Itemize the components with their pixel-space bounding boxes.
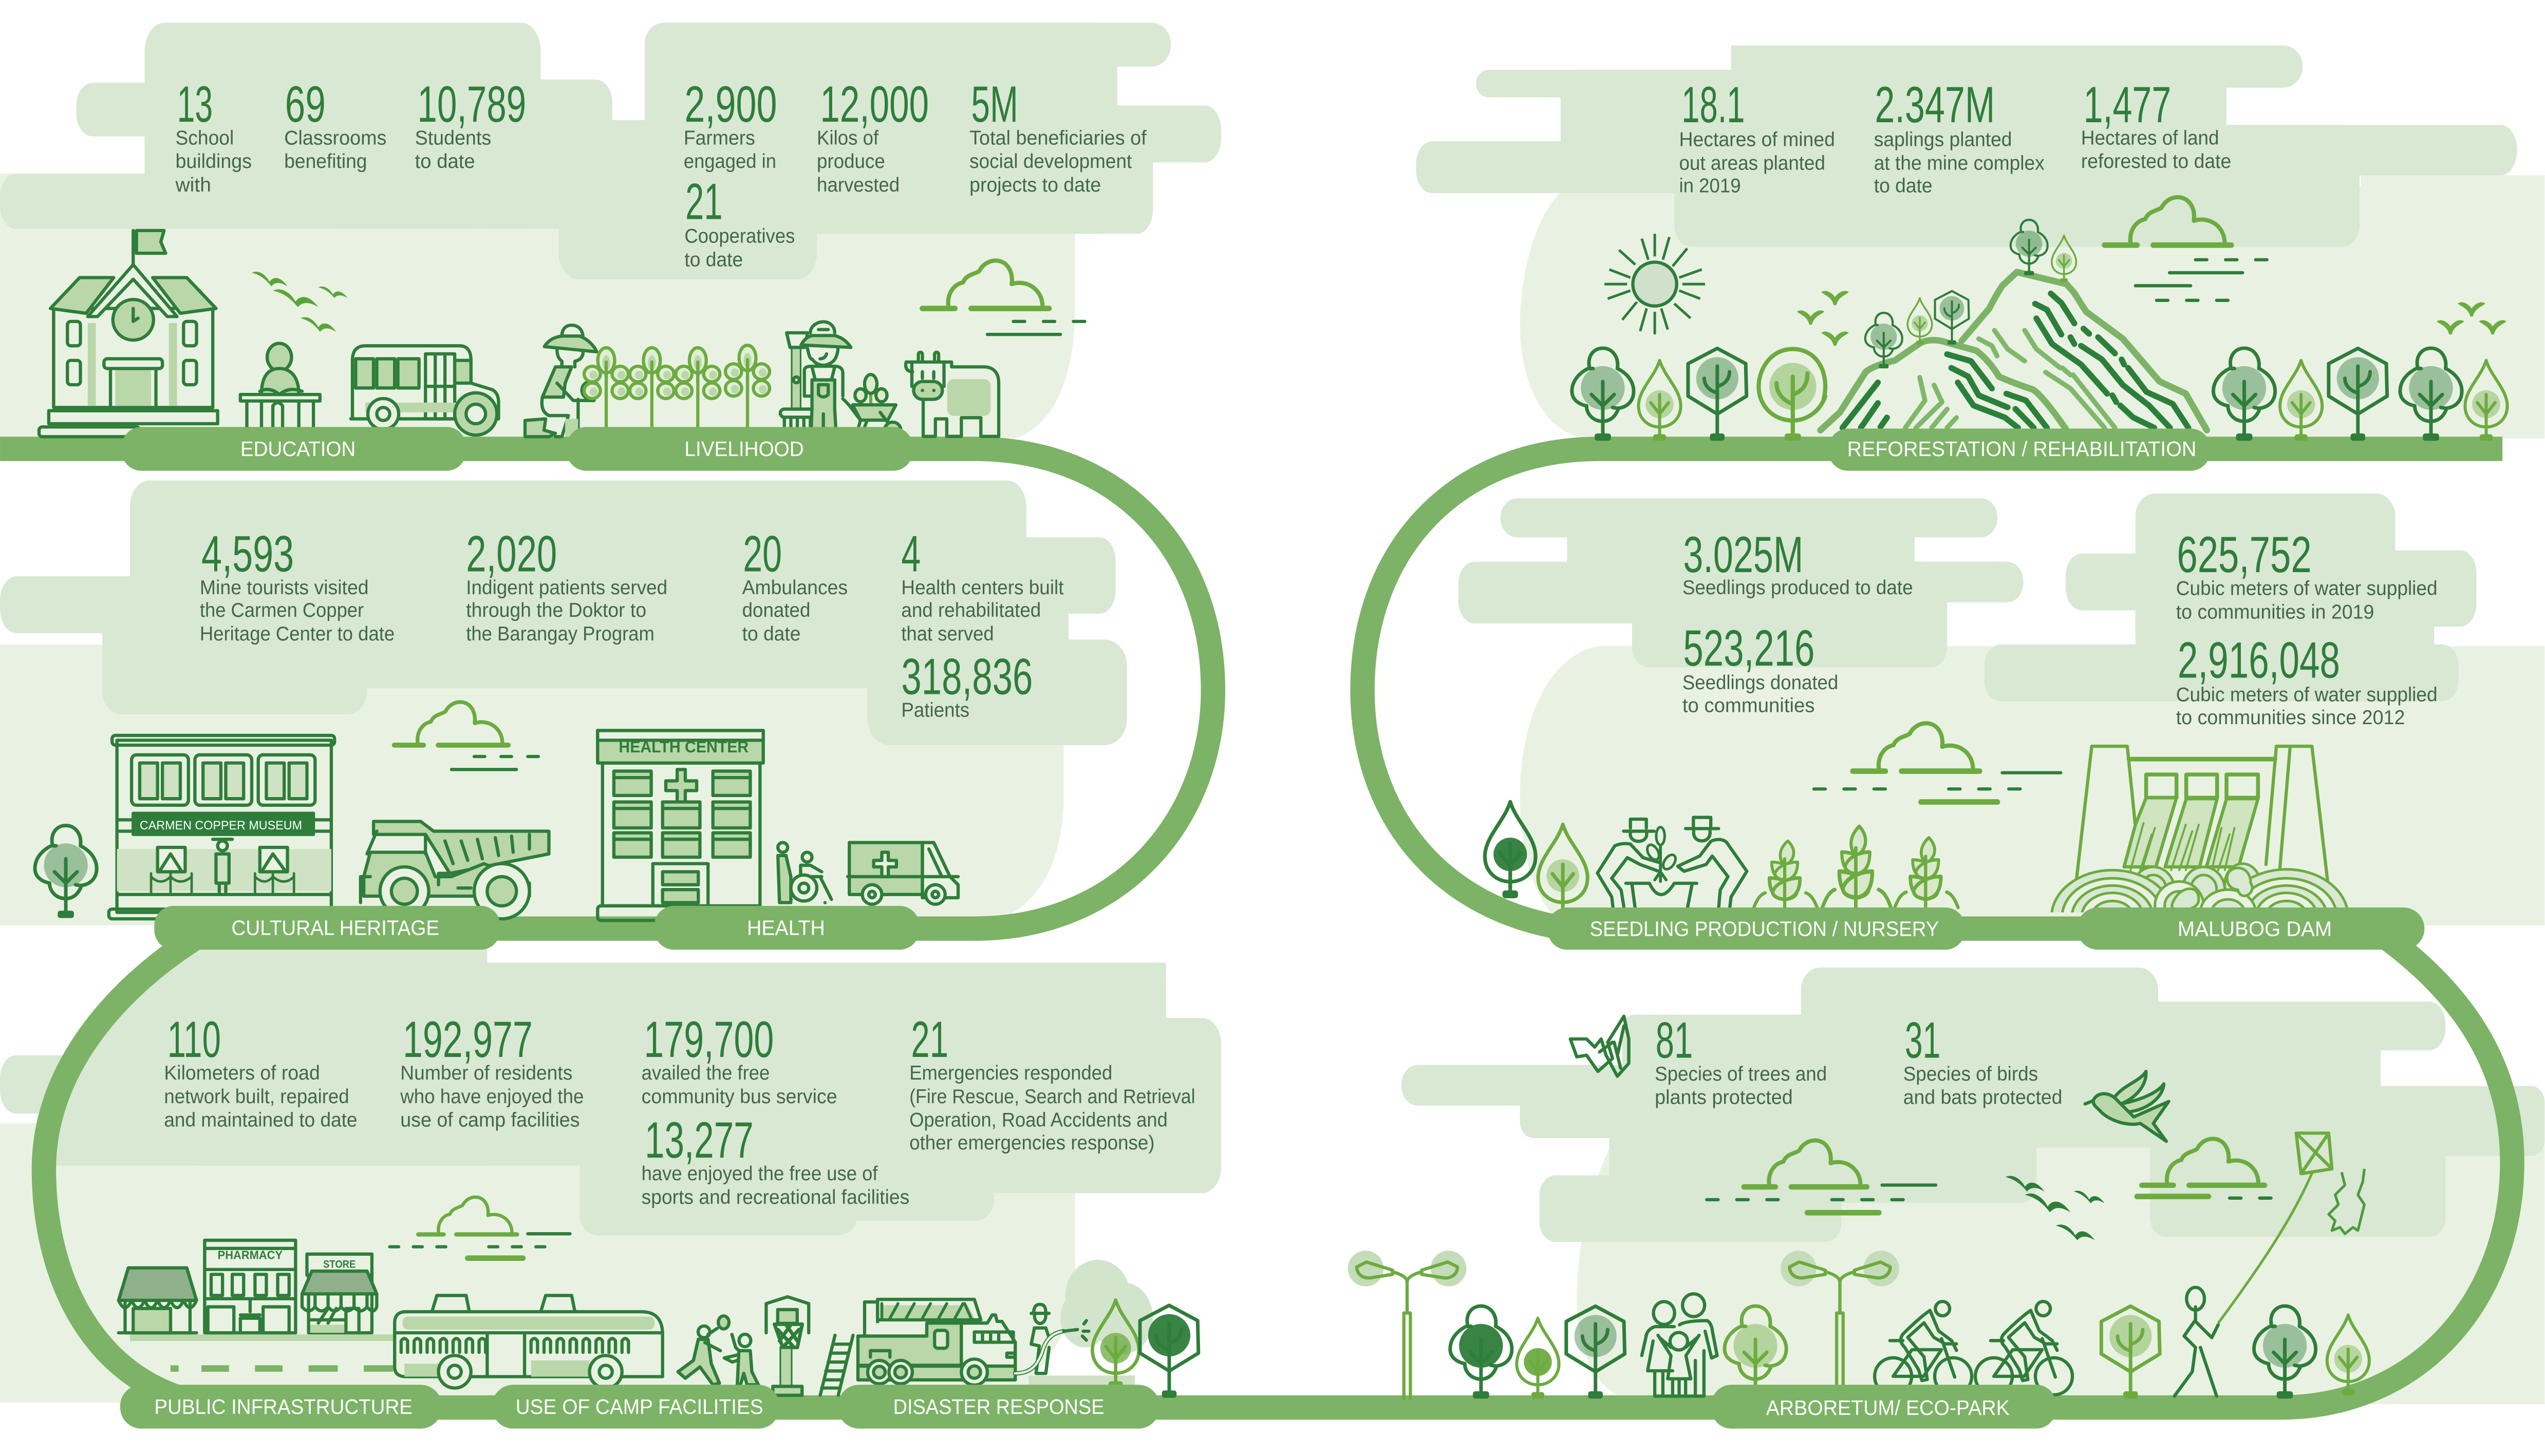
text: museum sign: CARMEN COPPER MUSEUM <box>140 819 302 833</box>
stat: bus service: 179,700 <box>644 1011 774 1068</box>
panel: use of camp facilities <box>678 1297 809 1395</box>
stat: produce <box>817 76 929 196</box>
stat: camp residents: Number of residents <box>400 1062 572 1084</box>
stat: ambulances: 20 <box>743 526 782 583</box>
panel: arboretum <box>1348 1016 2369 1398</box>
stat: bird species <box>1903 1012 2062 1108</box>
pill: cultural heritage: CULTURAL HERITAGE <box>232 916 439 940</box>
stat: emergencies: 21 <box>911 1011 948 1068</box>
icon: cow <box>906 352 999 437</box>
stat: ambulances: to date <box>742 623 800 645</box>
icon: wheelbarrow with seedling <box>843 374 901 438</box>
stat: indigent patients: the Barangay Program <box>466 623 654 645</box>
stat: cooperatives: to date <box>684 249 743 271</box>
stat: water 2019: 625,752 <box>2177 526 2312 583</box>
pill: arboretum: ARBORETUM/ ECO-PARK <box>1766 1396 2010 1420</box>
stat: health centers: that served <box>901 623 994 645</box>
icon: trees beside nursery <box>1485 802 1587 918</box>
panel: health <box>597 730 958 920</box>
icon: hex tree <box>2101 1306 2160 1398</box>
panel: seedling production <box>1485 723 2061 918</box>
icon: tree row right <box>2213 348 2507 441</box>
stat: saplings: at the mine complex <box>1874 152 2045 174</box>
stat: water since 2012: 2,916,048 <box>2178 632 2340 689</box>
stat: patients: 318,836 <box>901 648 1033 705</box>
pill: disaster response <box>838 1385 1159 1429</box>
icon: cloud <box>922 260 1088 334</box>
stat: health centers: and rehabilitated <box>901 599 1041 621</box>
stat: seedlings produced: Seedlings produced to date <box>1682 577 1913 599</box>
icon: street lamp left <box>1348 1251 1466 1398</box>
icon: school bus <box>351 346 498 435</box>
stat: tree species: plants protected <box>1655 1086 1793 1108</box>
icon: health center building <box>597 730 763 920</box>
stat: patients <box>901 648 1033 722</box>
stat: mined hectares <box>1679 77 1835 197</box>
text: health center sign: HEALTH CENTER <box>619 738 748 756</box>
stat: indigent patients: through the Doktor to <box>466 599 646 621</box>
stat: water 2019: to communities in 2019 <box>2176 601 2374 623</box>
stat: ambulances: donated <box>742 599 810 621</box>
stat: students: to date <box>415 150 475 173</box>
pill: seedling production: SEEDLING PRODUCTION / NURSERY <box>1590 917 1939 940</box>
icon: tree row left <box>1572 348 1825 441</box>
icon: dam with spillway <box>2050 745 2348 912</box>
stat: farmers: engaged in <box>684 150 776 173</box>
stat: seedlings donated: 523,216 <box>1683 620 1814 677</box>
panel: livelihood <box>525 260 1088 438</box>
stat: students <box>415 76 526 173</box>
stat: seedlings produced: 3.025M <box>1683 526 1803 583</box>
cloud: arboretum <box>1401 968 2544 1242</box>
stat: tree species <box>1655 1012 1827 1108</box>
stat: mine tourists: Mine tourists visited <box>200 577 369 599</box>
icon: trees right <box>2254 1306 2369 1398</box>
stat: beneficiaries: Total beneficiaries of <box>969 127 1147 149</box>
stat: health centers: 4 <box>901 526 921 583</box>
stat: health centers <box>901 526 1064 645</box>
icon: wheelchair patient <box>778 843 831 902</box>
pill: arboretum <box>1712 1385 2056 1429</box>
stat: mined hectares: 18.1 <box>1681 77 1745 134</box>
stat: indigent patients: Indigent patients served <box>466 577 667 599</box>
stat: tree species: 81 <box>1656 1012 1693 1069</box>
stat: classrooms: 69 <box>285 76 326 133</box>
pill: livelihood <box>567 427 913 471</box>
stat: patients: Patients <box>901 699 969 722</box>
stat: seedlings donated: Seedlings donated <box>1682 672 1838 694</box>
pill: health: HEALTH <box>747 916 825 940</box>
icon: small birds <box>1797 291 2506 346</box>
stat: water since 2012: to communities since 2012 <box>2176 707 2405 729</box>
stat: reforested land: Hectares of land <box>2081 127 2219 149</box>
stat: cooperatives <box>684 174 795 271</box>
icon: fire truck <box>858 1299 1015 1385</box>
icon: sun <box>1604 234 1705 334</box>
stat: classrooms <box>284 76 386 173</box>
stat: classrooms: benefiting <box>284 150 367 173</box>
icon: flock of birds <box>2006 1176 2105 1240</box>
icon: bat <box>1570 1016 1629 1076</box>
icon: mountain <box>1821 272 2207 430</box>
stat: road network: Kilometers of road <box>164 1062 320 1084</box>
icon: cloud <box>395 702 542 769</box>
stat: water 2019 <box>2176 526 2438 623</box>
stat: school buildings: with <box>175 174 211 196</box>
stat: camp residents: who have enjoyed the <box>400 1086 584 1108</box>
pill: health <box>654 906 919 950</box>
stat: reforested land: reforested to date <box>2081 150 2231 173</box>
stat: emergencies <box>909 1011 1195 1154</box>
pill: use of camp facilities <box>492 1385 779 1429</box>
icon: cloud <box>390 1197 570 1258</box>
stat: school buildings: 13 <box>177 76 213 133</box>
icon: cloud <box>2105 197 2272 300</box>
stat: emergencies: other emergencies response) <box>909 1132 1155 1154</box>
icon: family <box>1642 1294 1717 1396</box>
panel: malubog dam <box>2050 745 2348 912</box>
stat: produce: 12,000 <box>820 76 929 133</box>
stat: camp residents: use of camp facilities <box>400 1109 580 1131</box>
stat: water since 2012 <box>2176 632 2438 729</box>
icon: cyclists <box>1875 1301 2072 1395</box>
pill: cultural heritage <box>154 906 500 950</box>
pill: education <box>122 427 466 471</box>
stat: bus service <box>642 1011 837 1108</box>
pill: malubog dam: MALUBOG DAM <box>2178 917 2332 940</box>
panel: disaster response <box>820 1260 1199 1398</box>
stat: produce: harvested <box>817 174 900 196</box>
cloud: reforestation <box>1416 46 2517 247</box>
icon: dump truck <box>361 821 549 919</box>
icon: road <box>130 1334 398 1369</box>
icon: two farmers holding a seedling <box>1598 818 1747 909</box>
stat: seedlings produced <box>1682 526 1913 599</box>
pill: malubog dam <box>2077 907 2424 950</box>
stat: mine tourists <box>200 526 395 645</box>
stat: emergencies: Emergencies responded <box>909 1062 1112 1084</box>
stat: farmers: 2,900 <box>684 76 777 133</box>
stat: beneficiaries: projects to date <box>969 174 1101 196</box>
pill: public infrastructure: PUBLIC INFRASTRUCTURE <box>154 1395 413 1419</box>
stat: ambulances: Ambulances <box>742 577 848 599</box>
stat: beneficiaries: 5M <box>971 76 1018 133</box>
pill: education: EDUCATION <box>240 437 355 461</box>
stat: mined hectares: Hectares of mined <box>1679 128 1835 150</box>
stat: road network: network built, repaired <box>164 1086 349 1108</box>
stat: produce: Kilos of <box>817 127 878 149</box>
stat: emergencies: Operation, Road Accidents and <box>909 1109 1168 1131</box>
text: store sign: STORE <box>323 1258 355 1271</box>
icon: community bus <box>395 1295 663 1388</box>
stat: road network: and maintained to date <box>164 1109 357 1131</box>
icon: cloud two <box>2137 1139 2273 1198</box>
cloud: public infrastructure and camp <box>0 938 1221 1235</box>
icon: school building <box>39 231 218 437</box>
icon: seedling plants <box>1754 826 1958 907</box>
icon: tree <box>35 825 97 918</box>
stat: mine tourists: the Carmen Copper <box>200 599 364 621</box>
stat: saplings <box>1874 77 2045 197</box>
icon: cloud one <box>1707 1141 1936 1213</box>
icon: trees at disaster response <box>1092 1300 1199 1398</box>
stat: sports facilities: sports and recreational facilities <box>642 1186 909 1208</box>
stat: seedlings donated: to communities <box>1682 694 1814 716</box>
stat: farmers: Farmers <box>684 127 755 149</box>
stat: emergencies: (Fire Rescue, Search and Retrieval <box>909 1086 1195 1108</box>
stat: students: 10,789 <box>417 76 526 133</box>
icon: swallow <box>2085 1071 2169 1141</box>
pill: livelihood: LIVELIHOOD <box>684 437 804 461</box>
stat: camp residents <box>400 1011 584 1131</box>
cloud: education <box>0 23 731 229</box>
text: pharmacy sign: PHARMACY <box>218 1248 283 1261</box>
stat: school buildings: School <box>175 127 234 149</box>
stat: saplings: saplings planted <box>1874 128 2012 150</box>
stat: road network <box>164 1011 357 1131</box>
stat: saplings: to date <box>1874 175 1933 197</box>
cloud: malubog dam <box>1985 494 2477 702</box>
stat: health centers: Health centers built <box>901 577 1064 599</box>
pill: use of camp facilities: USE OF CAMP FACILITIES <box>516 1395 763 1419</box>
stat: students: Students <box>415 127 491 149</box>
stat: camp residents: 192,977 <box>403 1011 533 1068</box>
stat: bird species: and bats protected <box>1903 1086 2062 1108</box>
stat: cooperatives: 21 <box>685 174 723 231</box>
icon: shop <box>119 1268 197 1333</box>
icon: store <box>302 1254 377 1333</box>
stat: road network: 110 <box>167 1011 221 1068</box>
cloud: seedling production <box>1458 498 2024 667</box>
stat: sports facilities <box>642 1112 909 1208</box>
stat: bird species: 31 <box>1905 1012 1940 1069</box>
pill: reforestation: REFORESTATION / REHABILITATION <box>1847 437 2196 461</box>
stat: tree species: Species of trees and <box>1655 1063 1827 1085</box>
stat: produce: produce <box>817 150 885 173</box>
stat: water since 2012: Cubic meters of water supplied <box>2176 684 2438 706</box>
panel: education <box>39 231 498 437</box>
pill: public infrastructure <box>120 1385 442 1429</box>
panel: reforestation <box>1572 197 2507 441</box>
stat: bird species: Species of birds <box>1903 1063 2038 1085</box>
stat: mined hectares: out areas planted <box>1679 152 1825 174</box>
stat: mine tourists: 4,593 <box>201 526 294 583</box>
stat: reforested land <box>2081 77 2231 173</box>
stat: ambulances <box>742 526 848 645</box>
icon: tree by family <box>1725 1306 1786 1398</box>
stat: bus service: community bus service <box>642 1086 837 1108</box>
stat: indigent patients: 2,020 <box>466 526 557 583</box>
cloud: cultural heritage and health <box>0 481 1127 745</box>
icon: street lamp center <box>1781 1251 1899 1398</box>
panel: public infrastructure <box>119 1197 663 1388</box>
icon: row of crops <box>584 345 770 437</box>
stat: saplings: 2.347M <box>1875 77 1995 134</box>
icon: people playing basketball <box>678 1316 758 1385</box>
icon: cloud <box>1814 723 2061 802</box>
icon: gardener with rake <box>780 322 851 437</box>
icon: ambulance <box>848 843 958 904</box>
icon: student at desk <box>240 344 320 428</box>
pill: disaster response: DISASTER RESPONSE <box>893 1395 1105 1419</box>
stat: cooperatives: Cooperatives <box>684 225 795 248</box>
stat: sports facilities: have enjoyed the free use of <box>642 1163 878 1185</box>
stat: bus service: availed the free <box>642 1062 770 1084</box>
green winding track <box>0 449 2512 1408</box>
icon: basketball hoop <box>766 1297 809 1395</box>
stat: sports facilities: 13,277 <box>645 1112 754 1169</box>
stat: indigent patients <box>466 526 667 645</box>
stat: beneficiaries <box>969 76 1147 196</box>
stat: school buildings <box>175 76 252 196</box>
icon: flock of birds <box>252 272 348 332</box>
icon: kneeling farmer <box>525 325 600 437</box>
icon: trees on mountain <box>1865 220 2076 368</box>
stat: beneficiaries: social development <box>969 150 1132 173</box>
stat: water 2019: Cubic meters of water supplied <box>2176 577 2438 599</box>
pill: reforestation <box>1828 428 2210 471</box>
stat: reforested land: 1,477 <box>2084 77 2171 134</box>
icon: firefighter with hose <box>1015 1304 1089 1373</box>
icon: museum building <box>109 735 334 919</box>
background tree silhouette <box>1028 1260 1153 1386</box>
pill: seedling production <box>1547 907 1965 950</box>
stat: mined hectares: in 2019 <box>1679 175 1741 197</box>
stat: farmers <box>684 76 777 173</box>
icon: ladder <box>820 1335 853 1395</box>
icon: pharmacy <box>204 1240 295 1333</box>
stat: mine tourists: Heritage Center to date <box>200 623 395 645</box>
icon: person flying a kite <box>2175 1133 2364 1396</box>
stat: school buildings: buildings <box>175 150 252 173</box>
stat: classrooms: Classrooms <box>284 127 386 149</box>
panel: cultural heritage <box>35 702 549 919</box>
icon: trees left <box>1450 1306 1625 1398</box>
cloud: livelihood <box>558 23 1221 279</box>
stat: seedlings donated <box>1682 620 1838 716</box>
